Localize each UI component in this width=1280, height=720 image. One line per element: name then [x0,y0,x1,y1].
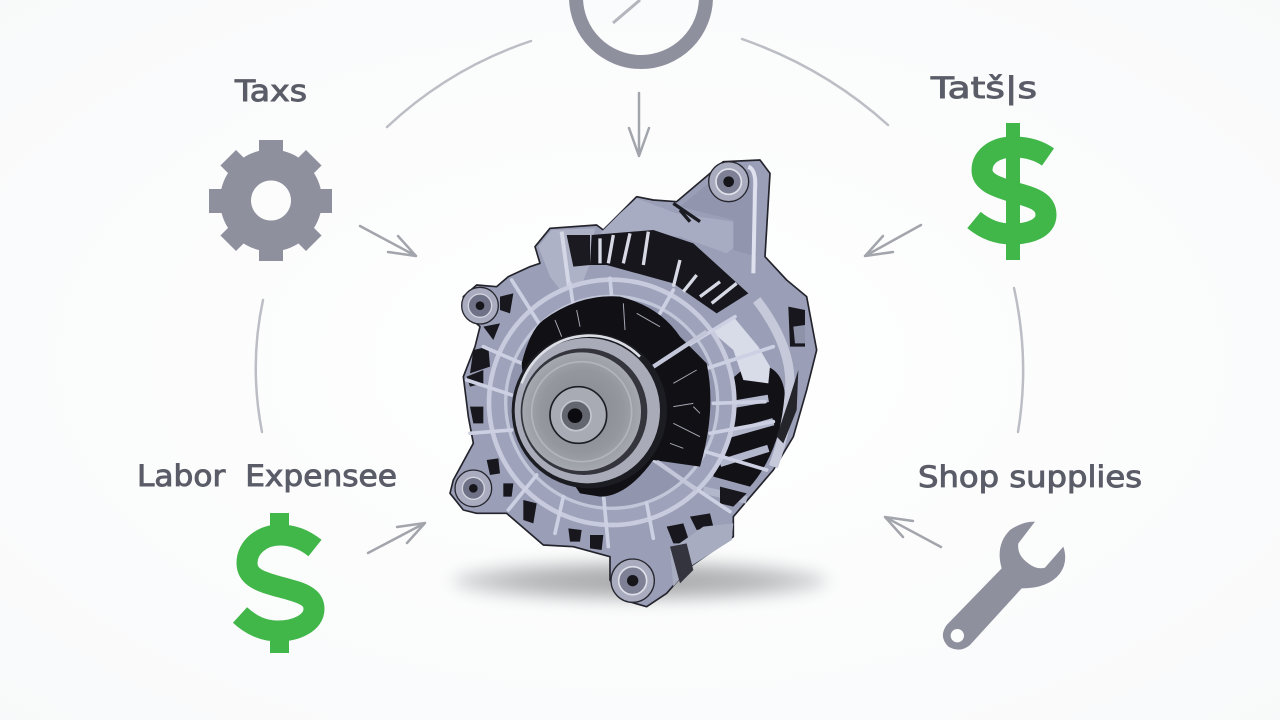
pulley [512,333,667,488]
top cooling fins [567,235,590,267]
arrow: from left dollar [368,523,425,553]
heading: Labor Expense: Labor Expensee [137,459,397,493]
mounting lugs [709,162,749,202]
housing silhouette [450,160,817,607]
heading: Taxs: Taxs [234,74,307,108]
outer ring [489,280,734,525]
fan blades [555,303,700,448]
icon: gear [209,140,332,261]
arc: top right [742,39,888,125]
icon: green dollar left [240,513,315,653]
dark fan area [522,296,710,497]
arc: left [256,300,263,432]
clock icon [576,0,706,62]
arrow: from wrench [885,517,941,547]
ground shadow [452,561,828,601]
right dark fin block [713,363,785,487]
ring spokes [467,278,773,547]
upper bracket faces [600,198,735,253]
arrow: from right dollar [865,225,921,256]
arrow: top down [629,93,649,156]
icon: green dollar right [974,123,1048,260]
arrow: from gear [360,226,416,256]
left dark vents [467,293,513,423]
alternator illustration [450,160,817,607]
arc: top left [387,41,531,127]
heading: Shop supplies: Shop supplies [918,460,1142,494]
arc: right [1014,288,1023,432]
icon: wrench [943,522,1065,650]
heading: Tatals: Tatš|s [930,71,1037,105]
